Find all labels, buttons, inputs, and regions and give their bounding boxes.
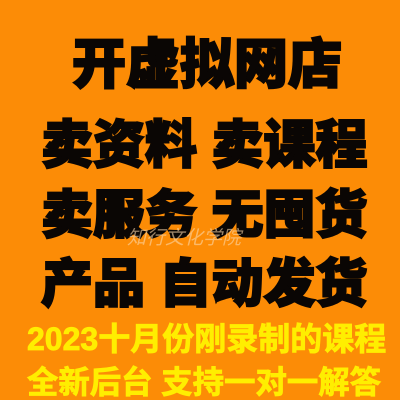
title: 开虚拟网店 [72,35,342,95]
headline: sell materials and courses: 卖资料 卖课程 [41,117,367,175]
headline: products auto delivery: 产品 自动发货 [41,256,367,314]
headline: sell services, no stock: 卖服务 无囤货 [41,187,367,245]
watermark: 知行文化学院 [127,228,241,249]
yellow line: new backend and one-on-one support: 全新后台 支持一对一解答 [27,365,381,400]
yellow line: recorded October 2023: 2023十月份刚录制的课程 [27,321,386,357]
